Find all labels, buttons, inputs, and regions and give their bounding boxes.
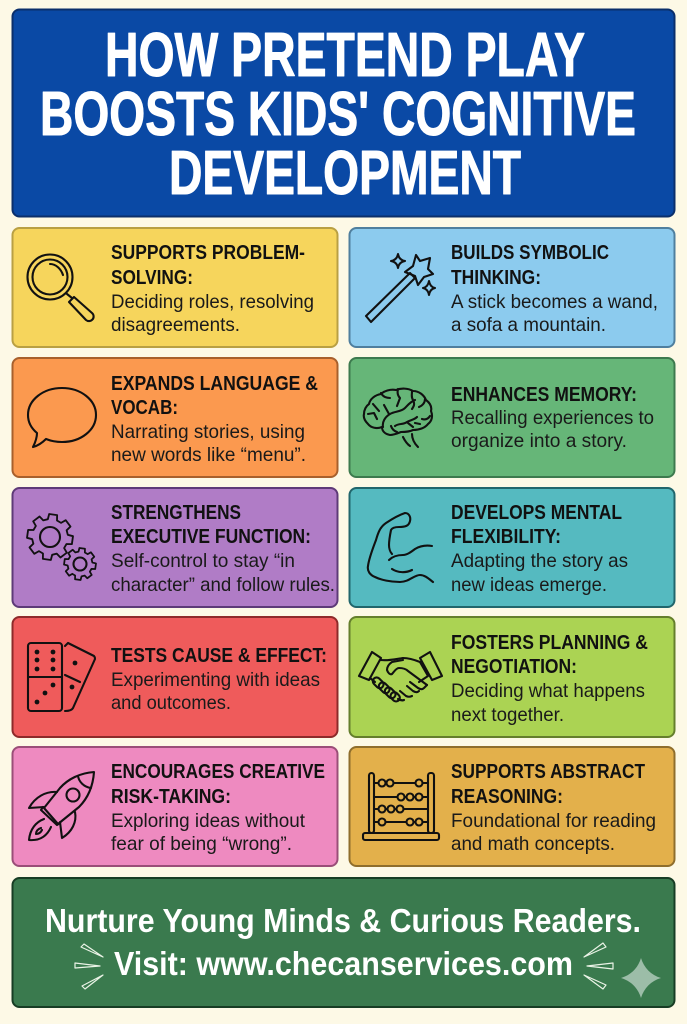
panel: enhances memory — [350, 358, 674, 477]
icon: brain — [364, 389, 432, 447]
heading — [111, 760, 325, 808]
icon: flexed arm — [368, 513, 433, 582]
title text: DEVELOPMENT — [169, 139, 521, 208]
heading: SUPPORTS ABSTRACT — [451, 760, 645, 783]
panel: fosters planning and negotiation — [350, 617, 674, 737]
panel: encourages creative risk-taking — [12, 747, 338, 866]
heading: STRENGTHENS — [111, 501, 241, 524]
description — [451, 550, 628, 596]
heading — [451, 241, 609, 289]
description: Exploring ideas without — [111, 810, 306, 832]
description: Recalling experiences to — [451, 407, 654, 429]
decorative rays left — [75, 944, 103, 989]
description: a sofa a mountain. — [451, 314, 606, 336]
heading: ENCOURAGES CREATIVE — [111, 760, 325, 783]
panel: expands language and vocab — [12, 358, 338, 477]
heading: REASONING: — [451, 785, 563, 808]
heading: FLEXIBILITY: — [451, 525, 561, 548]
heading — [451, 631, 648, 678]
description: next together. — [451, 704, 564, 726]
icon: abacus — [363, 773, 439, 840]
icon: gears — [24, 511, 98, 582]
description: character” and follow rules. — [111, 574, 335, 596]
heading: FOSTERS PLANNING & — [451, 631, 648, 654]
heading: SUPPORTS PROBLEM- — [111, 241, 305, 264]
description: and outcomes. — [111, 692, 231, 714]
description: new ideas emerge. — [451, 574, 607, 596]
heading — [111, 372, 318, 419]
heading — [451, 760, 645, 808]
description — [451, 407, 654, 452]
icon: magic wand — [366, 254, 435, 322]
heading — [111, 501, 311, 548]
panel: builds symbolic thinking — [350, 228, 674, 347]
icon: handshake — [359, 652, 442, 703]
panel: develops mental flexibility — [350, 488, 674, 607]
description — [111, 550, 335, 596]
heading: THINKING: — [451, 266, 541, 289]
description — [451, 680, 645, 726]
panel: supports problem-solving — [12, 228, 338, 347]
icon: magnifying glass — [28, 254, 94, 321]
description: new words like “menu”. — [111, 444, 306, 466]
heading: VOCAB: — [111, 396, 178, 419]
description: A stick becomes a wand, — [451, 291, 658, 313]
heading: ENHANCES MEMORY: — [451, 383, 637, 406]
description: Foundational for reading — [451, 810, 656, 832]
description — [451, 291, 658, 336]
title text — [40, 21, 636, 208]
description: Adapting the story as — [451, 550, 628, 572]
description: fear of being “wrong”. — [111, 833, 292, 855]
footer website link: Visit: www.checanservices.com — [114, 945, 573, 982]
icon: sparkle star — [621, 958, 661, 998]
description: organize into a story. — [451, 430, 627, 452]
heading: RISK-TAKING: — [111, 785, 231, 808]
heading: NEGOTIATION: — [451, 655, 577, 678]
description — [111, 669, 320, 714]
footer tagline: Nurture Young Minds & Curious Readers. — [45, 902, 641, 939]
panel: tests cause and effect — [12, 617, 338, 737]
icon: speech bubble — [28, 388, 96, 447]
heading: EXECUTIVE FUNCTION: — [111, 525, 311, 548]
heading: DEVELOPS MENTAL — [451, 501, 622, 524]
description: Self-control to stay “in — [111, 550, 295, 572]
description: disagreements. — [111, 314, 240, 336]
heading: BUILDS SYMBOLIC — [451, 241, 609, 264]
title banner — [12, 10, 674, 216]
description — [451, 810, 656, 855]
heading: TESTS CAUSE & EFFECT: — [111, 644, 327, 667]
description: Deciding roles, resolving — [111, 291, 314, 313]
icon: dominoes — [28, 643, 95, 711]
footer banner — [12, 878, 674, 1007]
description: Experimenting with ideas — [111, 669, 320, 691]
description: Narrating stories, using — [111, 421, 305, 443]
description — [111, 810, 306, 855]
heading: EXPANDS LANGUAGE & — [111, 372, 318, 395]
heading — [451, 501, 622, 548]
decorative rays right — [584, 943, 613, 989]
description: Deciding what happens — [451, 680, 645, 702]
heading — [111, 241, 305, 289]
icon: rocket — [29, 772, 94, 840]
panel: supports abstract reasoning — [350, 747, 674, 866]
description — [111, 421, 306, 466]
heading: SOLVING: — [111, 266, 193, 289]
description: and math concepts. — [451, 833, 615, 855]
panel: strengthens executive function — [12, 488, 338, 607]
description — [111, 291, 314, 336]
